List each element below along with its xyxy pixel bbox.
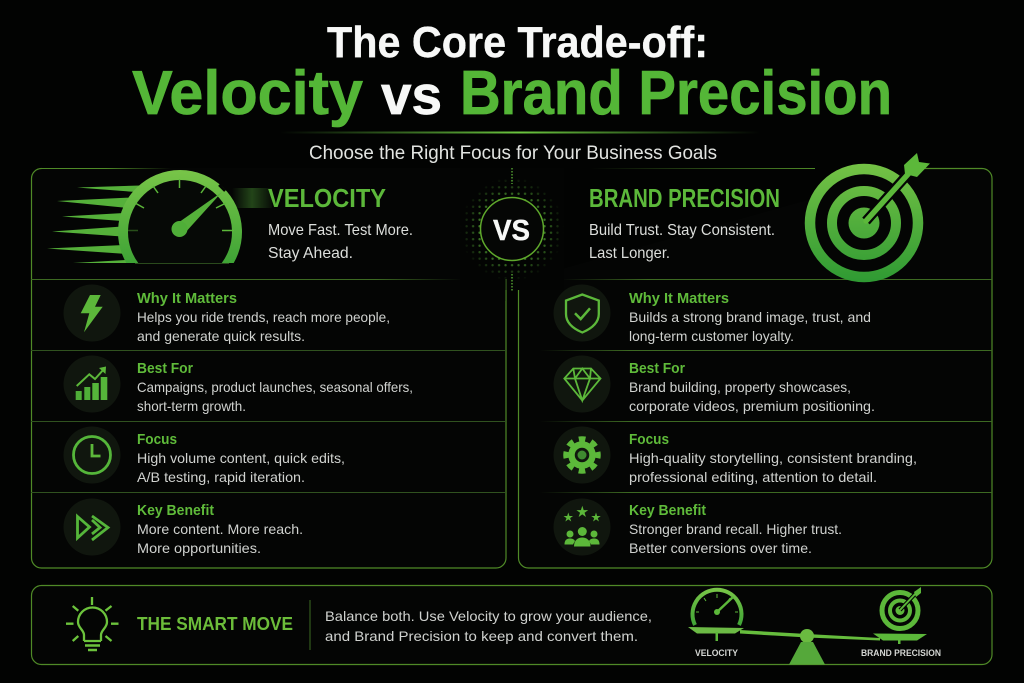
mini target — [882, 587, 921, 628]
text: best for: Campaigns, product launches, seasonal offers, — [137, 380, 413, 395]
text: key benefit: More opportunities. — [137, 541, 261, 556]
smart move heading: THE SMART MOVE — [137, 614, 293, 634]
glow band behind heading — [232, 188, 272, 208]
text: focus: High volume content, quick edits, — [137, 451, 345, 466]
text: focus: professional editing, attention to detail. — [629, 470, 877, 485]
velocity heading: VELOCITY — [268, 183, 386, 213]
text: best for: Brand building, property showcases, — [629, 380, 851, 395]
text: why it matters: Why It Matters — [629, 291, 729, 307]
text: focus: Focus — [629, 432, 669, 448]
text: focus: Focus — [137, 432, 177, 448]
title words: Brand Precision: Brand Precision — [460, 59, 892, 128]
row: why it matters — [554, 284, 871, 344]
icon: clock — [64, 426, 120, 484]
title line 1: The Core Trade-off: — [327, 18, 708, 67]
icon: growth chart — [64, 356, 120, 412]
icon: stars and people — [554, 498, 610, 556]
brand precision tagline: Last Longer. — [589, 245, 670, 262]
text: key benefit: Better conversions over time. — [629, 541, 812, 556]
title — [132, 18, 892, 128]
text: focus: A/B testing, rapid iteration. — [137, 470, 305, 485]
text: focus: High-quality storytelling, consistent branding, — [629, 451, 917, 466]
title word: Velocity: Velocity — [132, 59, 363, 128]
text: why it matters: long-term customer loyalty. — [629, 329, 794, 344]
row: key benefit — [554, 498, 842, 556]
icon: speedometer — [47, 175, 237, 270]
brand precision tagline: Build Trust. Stay Consistent. — [589, 222, 775, 239]
mini gauge — [692, 590, 742, 625]
text: best for: Best For — [629, 361, 685, 377]
row: focus — [64, 426, 345, 485]
panel: the smart move — [32, 586, 992, 664]
velocity tagline: Move Fast. Test More. — [268, 222, 413, 239]
text: key benefit — [137, 503, 303, 556]
text: key benefit: Key Benefit — [629, 503, 706, 519]
velocity tagline: Stay Ahead. — [268, 245, 353, 262]
smart move text — [325, 608, 652, 644]
text: why it matters — [137, 291, 390, 344]
panel: velocity — [31, 168, 506, 568]
balance scale: VELOCITY — [695, 648, 738, 658]
text: best for: Best For — [137, 361, 193, 377]
text: best for: corporate videos, premium positioning. — [629, 399, 875, 414]
text: why it matters: and generate quick results. — [137, 329, 305, 344]
row: why it matters — [64, 284, 390, 344]
text: focus — [629, 432, 917, 485]
text: why it matters — [629, 291, 871, 344]
row: focus — [554, 426, 917, 485]
icon: lightning bolt — [64, 284, 120, 342]
text: best for — [629, 361, 875, 414]
icon: target with arrow — [810, 153, 930, 277]
title word: vs: vs — [381, 64, 442, 126]
text: why it matters: Why It Matters — [137, 291, 237, 307]
vs badge — [465, 168, 559, 301]
brand precision tagline — [589, 222, 775, 262]
text: best for — [137, 361, 413, 414]
vs badge: VS — [493, 215, 530, 247]
row: key benefit — [64, 498, 303, 556]
balance scale — [688, 587, 941, 664]
icon: diamond — [554, 356, 610, 412]
icon: fast forward — [64, 498, 120, 556]
text: key benefit: More content. More reach. — [137, 522, 303, 537]
velocity tagline — [268, 222, 413, 262]
panel: brand precision — [518, 153, 992, 568]
text: best for: short-term growth. — [137, 399, 246, 414]
text: why it matters: Builds a strong brand image, trust, and — [629, 310, 871, 325]
text: focus — [137, 432, 345, 485]
icon: light bulb — [66, 597, 118, 650]
smart move text: and Brand Precision to keep and convert them. — [325, 628, 638, 644]
text: why it matters: Helps you ride trends, reach more people, — [137, 310, 390, 325]
subtitle: Choose the Right Focus for Your Business Goals — [309, 142, 717, 164]
text: key benefit: Stronger brand recall. Higher trust. — [629, 522, 842, 537]
text: key benefit — [629, 503, 842, 556]
icon: gear — [554, 426, 610, 484]
smart move text: Balance both. Use Velocity to grow your audience, — [325, 608, 652, 624]
balance scale: BRAND PRECISION — [861, 648, 941, 658]
row: best for — [554, 356, 875, 414]
brand precision heading: BRAND PRECISION — [589, 183, 780, 213]
row: best for — [64, 356, 413, 414]
icon: shield — [554, 284, 610, 342]
text: key benefit: Key Benefit — [137, 503, 214, 519]
